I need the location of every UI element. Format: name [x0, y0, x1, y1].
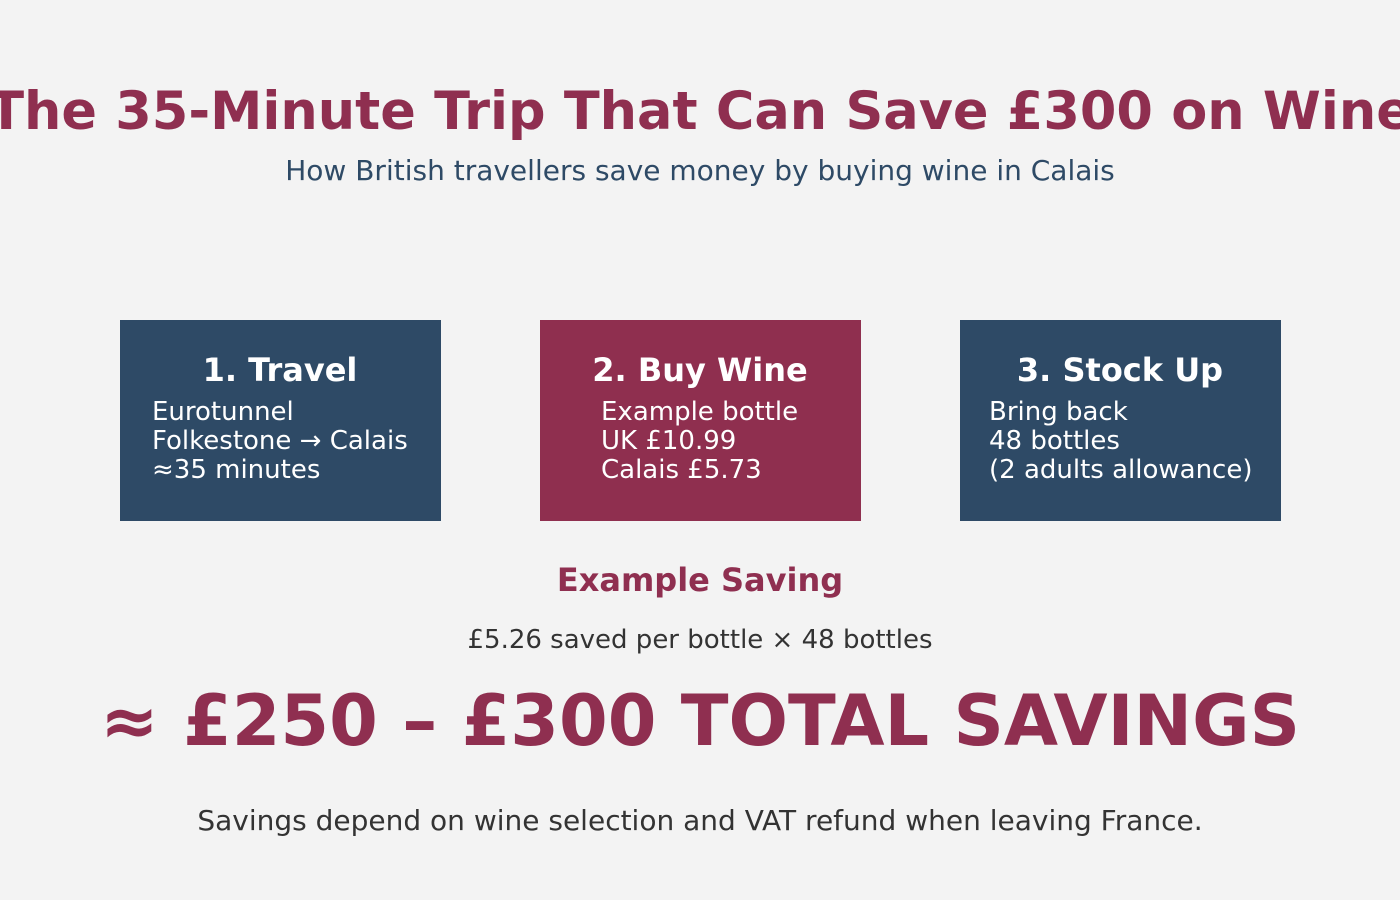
panel: buy wine: Example bottle [601, 397, 798, 427]
panel: travel: 1. Travel [203, 351, 357, 389]
panel: stock up: 3. Stock Up [1017, 351, 1223, 389]
text: calculation: £5.26 saved per bottle × 48 bottles [467, 625, 933, 655]
panel: buy wine: Calais £5.73 [601, 455, 762, 485]
panel: travel [120, 320, 441, 521]
subtitle: How British travellers save money by buying wine in Calais [285, 154, 1115, 187]
panel: stock up: 48 bottles [989, 426, 1120, 456]
panel: buy wine [540, 320, 861, 521]
panel: buy wine: 2. Buy Wine [592, 351, 808, 389]
total savings: ≈ £250 – £300 TOTAL SAVINGS [100, 680, 1300, 762]
panel: travel: Folkestone → Calais [152, 426, 408, 456]
title: The 35-Minute Trip That Can Save £300 on Wine [0, 81, 1400, 142]
panel: buy wine: UK £10.99 [601, 426, 736, 456]
panel: stock up: (2 adults allowance) [989, 455, 1252, 485]
panel: stock up [960, 320, 1281, 521]
panel: stock up: Bring back [989, 397, 1128, 427]
heading: example saving: Example Saving [557, 561, 843, 599]
footnote: Savings depend on wine selection and VAT refund when leaving France. [197, 804, 1203, 837]
panel: travel: ≈35 minutes [152, 455, 320, 485]
panel: travel: Eurotunnel [152, 397, 294, 427]
